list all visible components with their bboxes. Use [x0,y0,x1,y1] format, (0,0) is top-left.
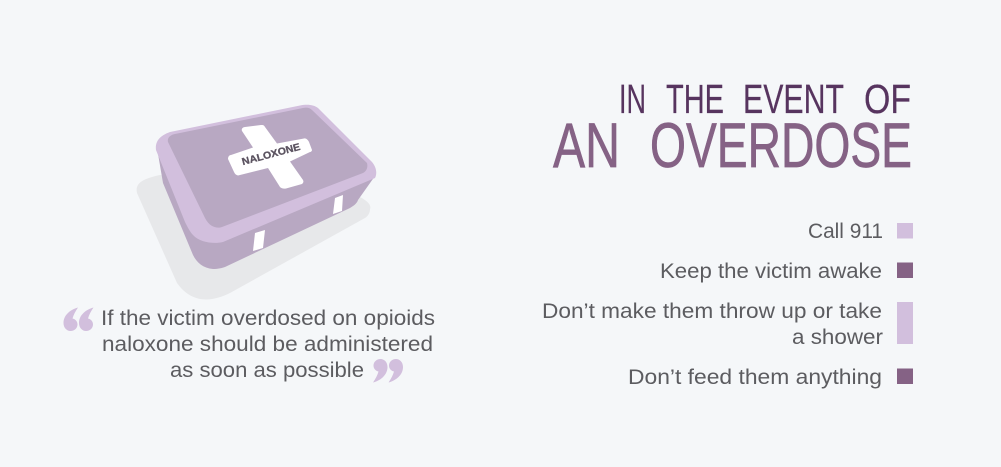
kit body [157,130,375,269]
title line 1: EVENT [743,76,844,122]
item: call 911: Call 911 [808,220,883,243]
title line 2: AN [553,111,620,181]
kit shadow [137,175,370,299]
item: keep awake: Keep the victim awake [660,260,882,283]
icon: closing quote [373,359,403,382]
quote text: as soon as possible [170,359,364,382]
white cross [228,125,312,189]
cross label: NALOXONE [241,142,302,168]
left clasp [253,230,265,251]
item: no food: Don’t feed them anything [628,366,882,389]
title line 1: IN [619,76,646,122]
kit lid rim [156,105,376,243]
quote text: naloxone should be administered [102,333,433,356]
item: no vomiting or shower: a shower [792,326,883,349]
icon: naloxone first aid kit [137,105,376,299]
title line 2 [553,111,912,181]
title line 1: THE [666,76,724,122]
quote block [64,307,435,382]
item: no vomiting or shower [542,300,913,349]
title line 2: OVERDOSE [650,111,912,181]
icon: opening quote [64,308,94,331]
action list [542,220,913,389]
item: no vomiting or shower: Don’t make them throw up or take [542,300,882,323]
quote text: If the victim overdosed on opioids [101,307,435,330]
right clasp [333,195,343,214]
title line 1: OF [864,76,911,122]
kit lid top [168,108,367,228]
title [553,76,912,181]
title line 1 [619,76,911,122]
quote text [101,307,435,382]
